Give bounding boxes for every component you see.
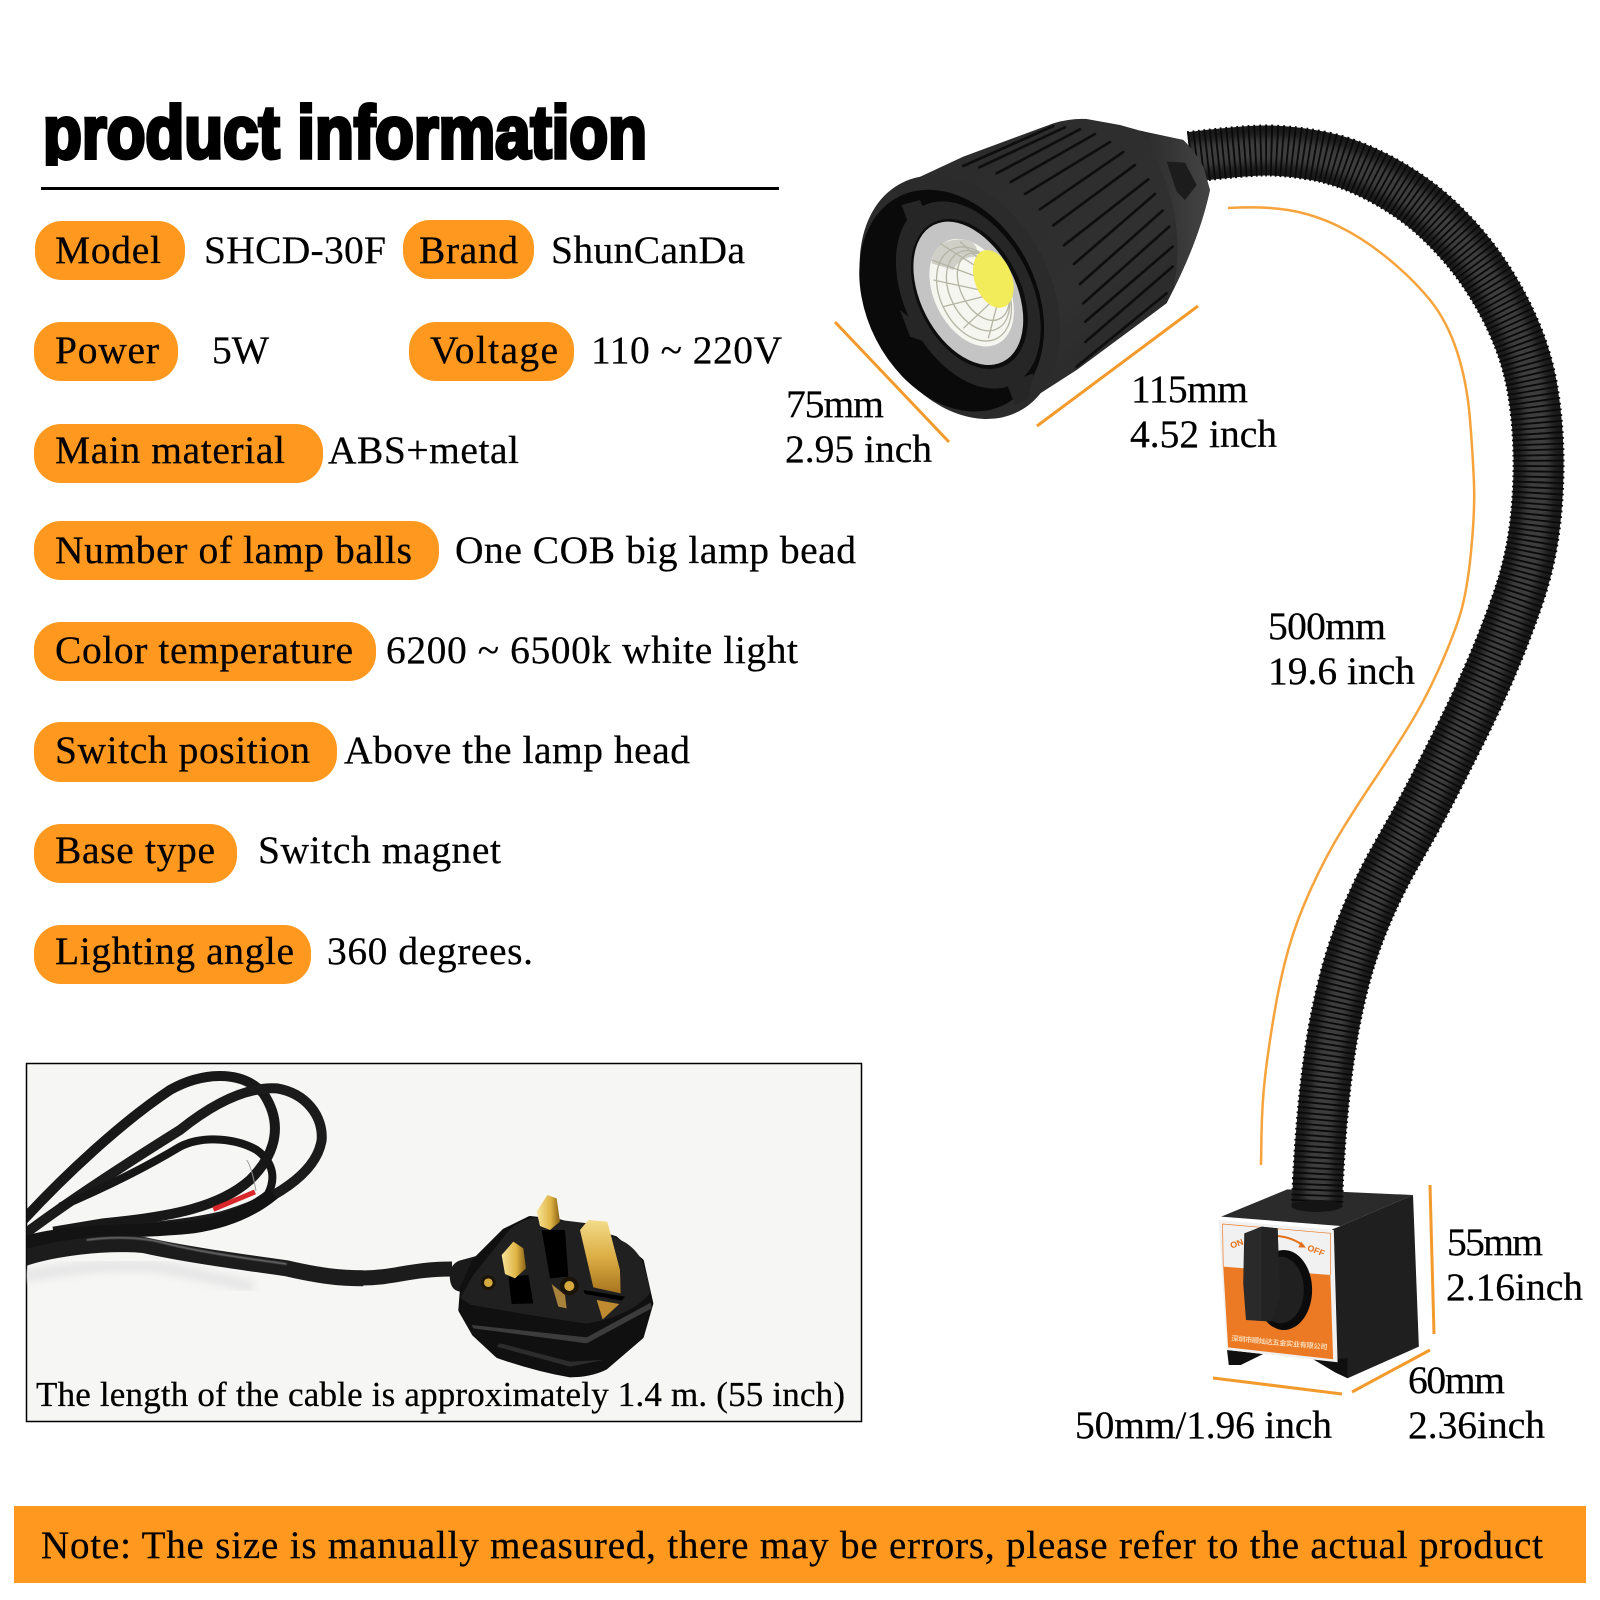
base top face bbox=[1221, 1189, 1413, 1226]
spec: voltage: 110 ~ 220V bbox=[591, 328, 782, 372]
cone and body silhouette bbox=[865, 119, 1210, 418]
switch handle bbox=[1243, 1227, 1280, 1322]
cable length caption: The length of the cable is approximately 1.4 m. (55 inch) bbox=[36, 1375, 845, 1414]
base side face bbox=[1332, 1195, 1419, 1378]
bezel bbox=[866, 177, 1070, 413]
spec: voltage bbox=[409, 322, 782, 381]
title: product information bbox=[43, 91, 647, 174]
spec: main material bbox=[34, 424, 519, 483]
spec: voltage: Voltage bbox=[430, 328, 558, 372]
manufacturer label: 深圳市顺灿达五金实业有限公司 bbox=[1231, 1334, 1328, 1352]
spec: switch position: Switch position bbox=[55, 728, 310, 772]
dimension label: head diameter: 75mm bbox=[786, 382, 884, 426]
spec: color temperature: 6200 ~ 6500k white light bbox=[386, 628, 798, 672]
plug pins bbox=[481, 1195, 621, 1295]
spec: brand: Brand bbox=[419, 228, 518, 272]
title underline bbox=[41, 187, 779, 190]
lamp base bbox=[1218, 1189, 1419, 1378]
dimension label: head diameter: 2.95 inch bbox=[785, 427, 932, 471]
spec: base type: Switch magnet bbox=[258, 828, 501, 872]
dimension label: base depth: 60mm bbox=[1408, 1358, 1505, 1402]
measure curve: arm length bbox=[1228, 207, 1474, 1165]
spec: main material: ABS+metal bbox=[328, 428, 519, 472]
dimension label: head length: 4.52 inch bbox=[1130, 412, 1277, 456]
measure line: head length bbox=[1037, 306, 1198, 426]
measure line: base height bbox=[1430, 1185, 1434, 1334]
inner black rim bbox=[823, 158, 1080, 443]
lamp head bbox=[820, 119, 1210, 453]
COB LED bbox=[966, 244, 1021, 314]
ON label: ON bbox=[1229, 1237, 1245, 1251]
spec: lighting angle: Lighting angle bbox=[55, 929, 294, 973]
spec: number of lamp balls: Number of lamp balls bbox=[55, 528, 412, 572]
neck foot bbox=[1292, 1200, 1342, 1212]
spec: lighting angle bbox=[34, 925, 533, 984]
measure line: head diameter bbox=[835, 322, 949, 442]
spec: color temperature bbox=[34, 622, 798, 681]
spec: power: Power bbox=[55, 328, 159, 372]
specification list bbox=[34, 220, 856, 984]
lens reflector bbox=[891, 203, 1046, 383]
spec: brand: ShunCanDa bbox=[551, 228, 745, 272]
spec: number of lamp balls bbox=[34, 521, 856, 580]
spec: lighting angle: 360 degrees. bbox=[327, 929, 533, 973]
head grooves bbox=[963, 126, 1173, 367]
dimension label: base width: 50mm/1.96 inch bbox=[1075, 1403, 1332, 1447]
spec: brand bbox=[403, 220, 745, 279]
OFF label: OFF bbox=[1306, 1243, 1327, 1259]
dimension label: base height: 2.16inch bbox=[1446, 1265, 1583, 1309]
panel: cable and plug photo bbox=[20, 1064, 862, 1422]
spec: model bbox=[35, 221, 386, 280]
cable to plug bbox=[362, 1269, 452, 1278]
note banner bbox=[14, 1506, 1586, 1583]
cable bundle bbox=[20, 1076, 363, 1287]
spec: model: Model bbox=[55, 228, 161, 272]
neck collar bbox=[1140, 131, 1210, 290]
dial bbox=[1256, 1250, 1312, 1330]
dimension label: arm length: 500mm bbox=[1268, 604, 1386, 648]
spec: base type: Base type bbox=[55, 828, 215, 872]
dimension label: arm length bbox=[1268, 604, 1415, 693]
dimension label: head diameter bbox=[785, 382, 932, 471]
dimension label: head length: 115mm bbox=[1131, 367, 1248, 411]
note banner: Note: The size is manually measured, there may be errors, please refer to the actual product bbox=[41, 1524, 1543, 1567]
dimension label: base height: 55mm bbox=[1447, 1220, 1543, 1264]
measure line: base depth bbox=[1352, 1350, 1430, 1392]
measure line: base width bbox=[1213, 1378, 1342, 1394]
spec: switch position bbox=[34, 722, 690, 782]
gooseneck arm bbox=[1190, 150, 1539, 1206]
spec: power bbox=[34, 322, 270, 381]
dimension label: arm length: 19.6 inch bbox=[1268, 649, 1415, 693]
icon: UK plug bbox=[450, 1195, 652, 1374]
base feet bbox=[1227, 1350, 1348, 1378]
dimension label: base depth: 2.36inch bbox=[1408, 1403, 1545, 1447]
spec: color temperature: Color temperature bbox=[55, 628, 353, 672]
bezel tabs bbox=[900, 200, 1033, 405]
dimension label: base depth bbox=[1408, 1358, 1545, 1447]
dimension label: base height bbox=[1446, 1220, 1583, 1309]
dimension label: head length bbox=[1130, 367, 1277, 456]
spec: number of lamp balls: One COB big lamp bead bbox=[455, 528, 856, 572]
spec: power: 5W bbox=[212, 328, 270, 372]
spec: main material: Main material bbox=[55, 428, 285, 472]
spec: base type bbox=[34, 824, 501, 883]
base label plate bbox=[1218, 1220, 1338, 1362]
lens seat bbox=[887, 199, 1051, 389]
outer front ring bbox=[820, 141, 1100, 453]
rotation arrow bbox=[1278, 1236, 1304, 1246]
switch button bbox=[1167, 162, 1197, 200]
spec: switch position: Above the lamp head bbox=[344, 728, 690, 772]
spec: model: SHCD-30F bbox=[204, 228, 386, 272]
